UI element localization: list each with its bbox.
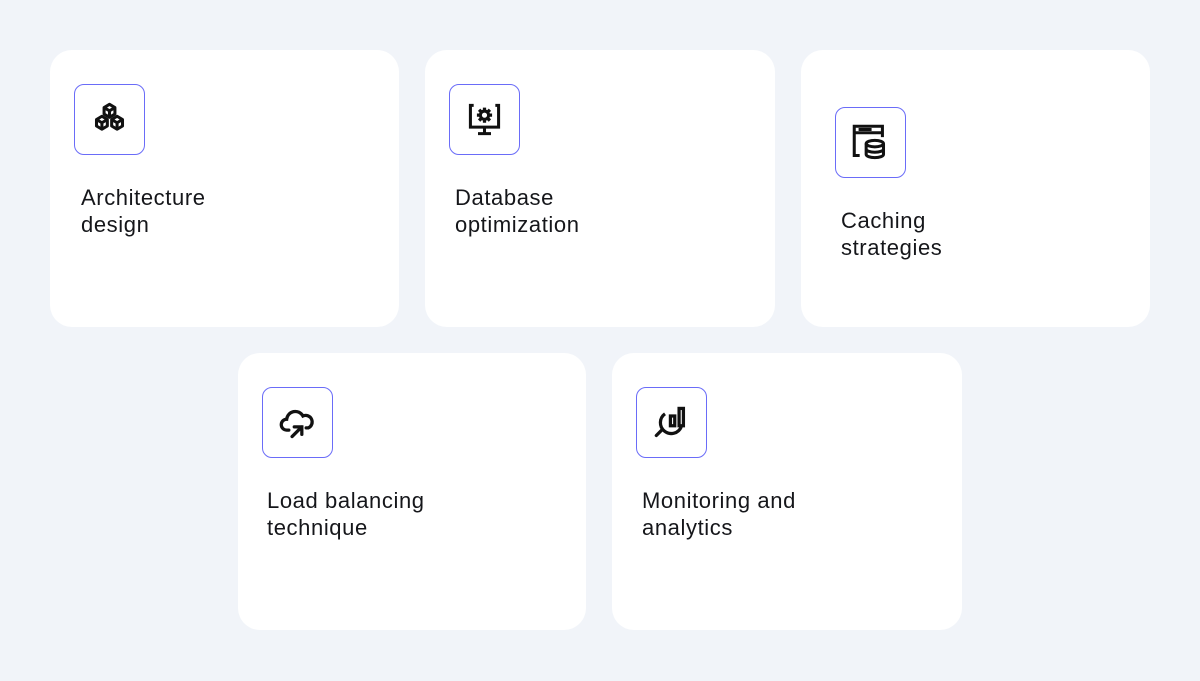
- label: design: [81, 212, 149, 237]
- label: strategies: [841, 235, 942, 260]
- label: Caching: [841, 208, 926, 233]
- card: caching strategies: [801, 50, 1150, 327]
- card: monitoring: [612, 353, 962, 630]
- card: load balancing: [238, 353, 586, 630]
- card: database optimization: [425, 50, 775, 327]
- label: analytics: [642, 515, 733, 540]
- label: optimization: [455, 212, 580, 237]
- label: [642, 488, 796, 540]
- label: [267, 488, 425, 540]
- icon: magnifier chart: [636, 387, 707, 458]
- card: architecture design: [50, 50, 399, 327]
- icon: monitor gear: [449, 84, 520, 155]
- label: Monitoring and: [642, 488, 796, 513]
- label: technique: [267, 515, 368, 540]
- label: Load balancing: [267, 488, 425, 513]
- icon: cubes: [74, 84, 145, 155]
- label: Database: [455, 185, 554, 210]
- icon: cloud arrow: [262, 387, 333, 458]
- icon: cache database: [835, 107, 906, 178]
- label: [81, 185, 206, 237]
- label: [455, 185, 580, 237]
- label: [841, 208, 942, 260]
- label: Architecture: [81, 185, 206, 210]
